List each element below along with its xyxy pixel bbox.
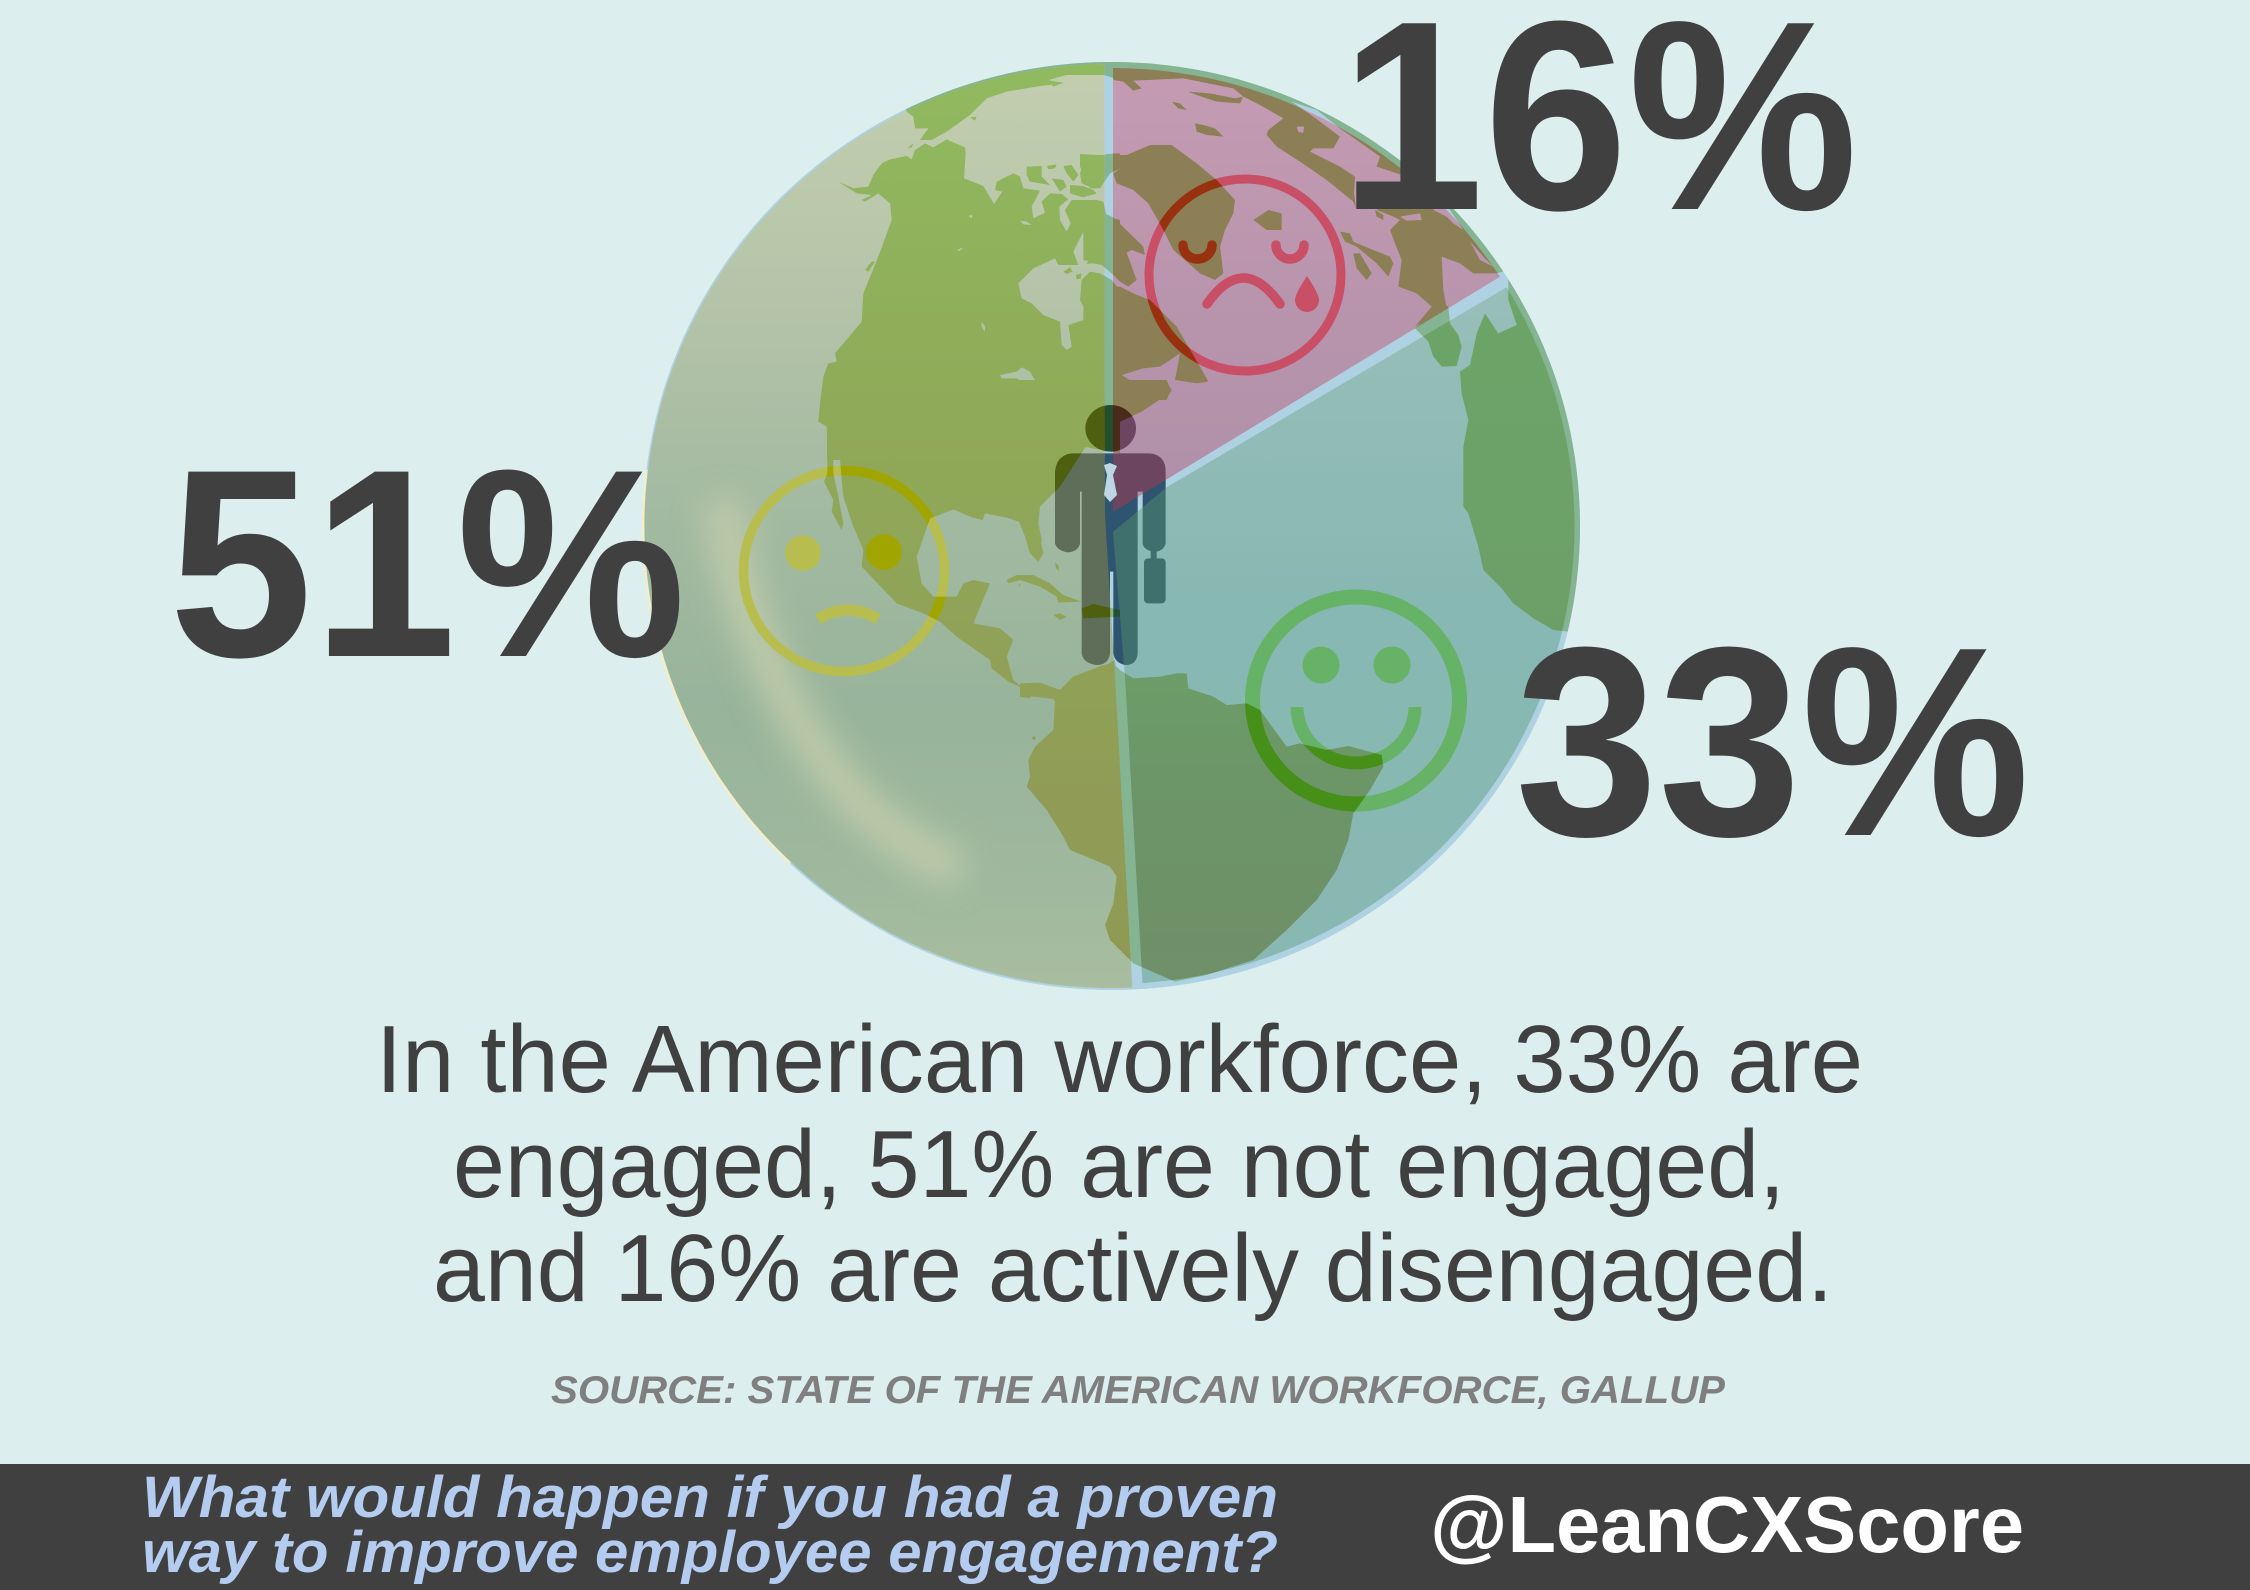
summary text: engaged, 51% are not engaged, — [453, 1111, 1785, 1218]
footer question: way to improve employee engagement? — [142, 1520, 1278, 1585]
footer handle: @LeanCXScore — [1430, 1480, 2024, 1569]
summary text: In the American workforce, 33% are — [376, 1006, 1863, 1113]
footer question — [142, 1465, 1278, 1585]
statistic: 33%: 33% — [1515, 592, 2030, 893]
pie chart on globe — [640, 40, 1633, 995]
wedge: 51% not engaged — [640, 60, 1140, 995]
summary text: and 16% are actively disengaged. — [433, 1215, 1833, 1322]
globe base and wedge gaps — [640, 40, 1633, 995]
icon: businessman figure — [1055, 405, 1166, 665]
source note: SOURCE: STATE OF THE AMERICAN WORKFORCE, GALLUP — [551, 1369, 1726, 1412]
icon: neutral yellow face — [738, 466, 950, 676]
footer question: What would happen if you had a proven — [142, 1465, 1278, 1530]
icon: crying red face — [1144, 174, 1346, 376]
wedge: 16% actively disengaged — [1113, 68, 1500, 497]
wedge: 33% engaged — [1124, 288, 1574, 983]
summary text — [376, 1006, 1863, 1322]
footer bar — [0, 1464, 2250, 1590]
statistic: 51%: 51% — [169, 413, 686, 713]
globe left rim highlight — [643, 470, 790, 863]
icon: happy green face — [1245, 590, 1467, 812]
